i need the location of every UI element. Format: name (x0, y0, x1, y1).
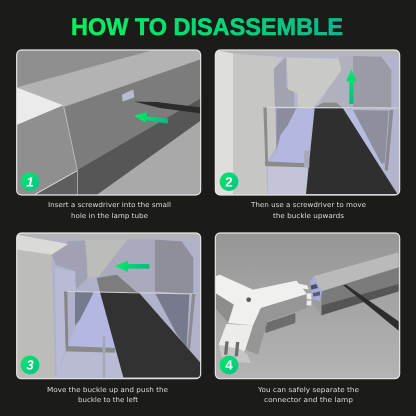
title: HOW TO DISASSEMBLE (71, 14, 343, 41)
badge: number 4 (220, 356, 238, 374)
arrow: pointing left (134, 112, 168, 124)
caption: step 1: Insert a screwdriver into the small (48, 201, 171, 209)
arrow: pointing left (115, 261, 149, 272)
caption: step 1: hole in the lamp tube (71, 212, 148, 220)
caption: step 3: Move the buckle up and push the (47, 386, 168, 394)
caption: step 3 (47, 386, 168, 404)
icon: screwdriver (343, 285, 399, 331)
caption: step 2: Then use a screwdriver to move (250, 201, 366, 209)
black tape strip (100, 292, 201, 377)
badge: number 3: 3 (26, 358, 34, 373)
icon: screwdriver (134, 102, 201, 113)
badge: number 1: 1 (26, 175, 34, 189)
badge: number 2: 2 (225, 175, 233, 189)
connector clip (310, 276, 322, 301)
buckle (286, 57, 341, 108)
caption: step 2 (250, 201, 366, 220)
badge: number 4: 4 (225, 358, 233, 373)
arrow: pointing up (346, 69, 357, 104)
panel: step 1 (17, 50, 201, 195)
Y connector (215, 275, 311, 363)
badge: number 3 (21, 356, 39, 374)
panel: step 4 (215, 233, 400, 379)
badge: number 2 (220, 172, 238, 191)
lamp tube (313, 252, 399, 291)
caption: step 4 (257, 386, 359, 404)
hole in lamp tube (122, 89, 134, 102)
caption: step 2: the buckle upwards (273, 212, 344, 220)
panel: step 2 (215, 50, 400, 195)
black tape strip (306, 108, 397, 194)
panel: step 3 (17, 233, 201, 379)
caption: step 4: connector and the lamp (264, 396, 353, 404)
caption: step 4: You can safely separate the (257, 386, 359, 394)
caption: step 3: buckle to the left (78, 396, 138, 404)
caption: step 1 (48, 201, 171, 220)
buckle (85, 240, 127, 279)
badge: number 1 (21, 172, 39, 191)
